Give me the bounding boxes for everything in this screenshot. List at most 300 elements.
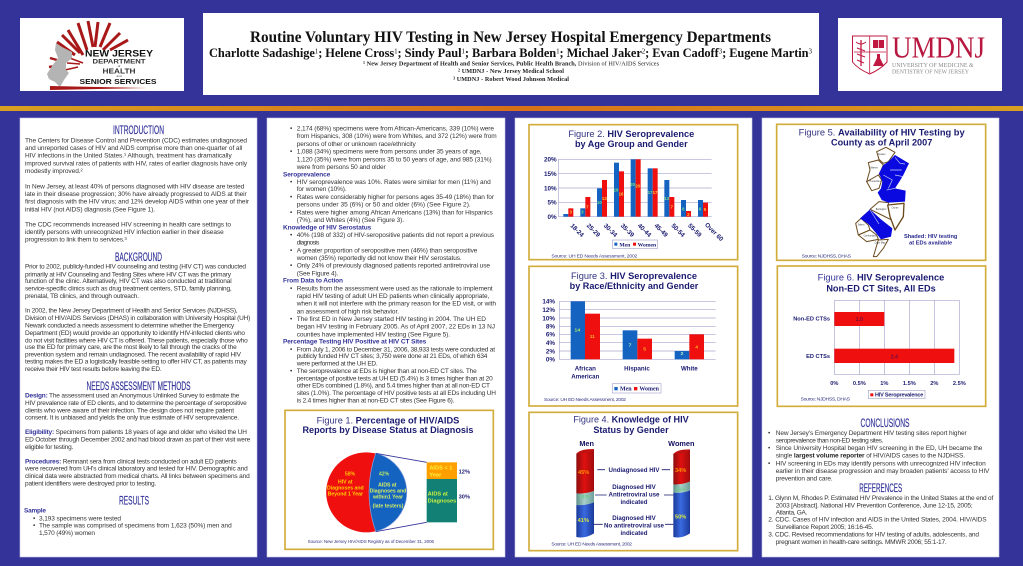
text block: conclusions: single largest volume reporter of HIV/AIDS cases to the NJDHSS. <box>776 453 965 460</box>
text block: seroprevalence: Seroprevalence <box>283 171 331 178</box>
text block: needs assessment methods: clinical data were abstracted from medical charts. All links between specimens and <box>25 473 250 480</box>
figure 3 bar values: 11 <box>590 334 595 340</box>
text block: from data to action: From Data to Action <box>283 278 343 285</box>
logo: UMDNJ: DENTISTRY OF NEW JERSEY <box>892 70 970 76</box>
text block: seroprevalence: Rates were considerably higher for persons ages 35-49 (18%) than for <box>297 194 495 201</box>
figure 2 y-axis labels: 5% <box>548 200 557 207</box>
figure 6 category labels <box>793 317 830 360</box>
affiliations: New Jersey Department of Health and Senior Services, Public Health Branch, <box>365 60 578 68</box>
figure 2 bar values: 10 <box>597 200 602 205</box>
figure 3 y-axis labels: 14% <box>542 299 555 306</box>
text block: sample continued <box>290 125 497 171</box>
text block: results sample: The sample was comprised of specimens from 1,623 (50%) men and <box>39 523 232 530</box>
map annotation: Shaded: HIV testing <box>904 234 958 240</box>
authors: ; Barbara Bolden <box>465 46 556 60</box>
figure 6 source: Source: NJDHSS, DHAS <box>801 397 851 403</box>
figure 2 y-axis labels: 10% <box>544 185 557 192</box>
text block: from data to action: rapid HIV testing of adult UH ED patients when clinically appropriate, <box>297 293 490 300</box>
text block: conclusions <box>768 430 990 483</box>
authors: 1 <box>315 48 319 56</box>
figure 2 bar values: 6 <box>682 206 685 211</box>
title panel: UMDNJ - Robert Wood Johnson Medical <box>455 76 569 83</box>
authors: 3 <box>719 48 723 56</box>
text block: percentage testing HIV positive: sites (1.0%). The percentage of HIV positive tests at all EDs including UH <box>297 390 496 397</box>
text block: references: Atlanta, GA. <box>776 510 808 517</box>
New Jersey county map: Hunterdon <box>870 180 881 183</box>
figure 5 title: Figure 5. Availability of HIV Testing by <box>799 127 966 137</box>
figure 2 legend: Men <box>619 242 631 248</box>
figure 3 y-axis labels: 6% <box>546 332 555 339</box>
text block: from data to action: • <box>290 285 293 292</box>
text block: introduction: first diagnosis with the HIV virus; and 12% develop AIDS within one year of their <box>25 199 250 206</box>
text block: sample continued: 1,120 (35%) were from persons 35 to 50 years of age, and 985 (31%) <box>297 156 492 163</box>
text block: introduction: and unreported cases of HIV and AIDS comprise more than one-quarter of all <box>25 145 243 152</box>
text block: introduction: In New Jersey, at least 40% of persons diagnosed with HIV disease are tested <box>25 183 245 190</box>
text block: seroprevalence <box>283 171 495 224</box>
figure 3 title: Figure 3. HIV Seroprevalence <box>571 271 697 281</box>
figure 3 bar values: 14 <box>575 328 580 334</box>
text block: background: Prior to 2002, publicly-funded HIV counseling and testing (HIV CT) was conducted <box>25 264 246 271</box>
title panel: 3 <box>453 76 455 80</box>
text block: sample continued: • <box>290 149 293 156</box>
figure 3 y-axis labels: 8% <box>546 324 555 331</box>
figure 3 source: Source: UH ED Needs Assessment, 2002 <box>544 397 626 403</box>
figure 3 bar values: 7 <box>629 342 632 348</box>
authors: 3 <box>808 48 812 56</box>
New Jersey county map: Cape May <box>875 242 886 244</box>
figure 3 legend: Women <box>639 387 660 393</box>
figure 2 bar values: 20 <box>635 183 641 188</box>
pie labels: 58% <box>345 471 356 477</box>
text block: from data to action: when it will not interfere with the primary reason for the ED visit, or with <box>296 301 496 308</box>
bar labels <box>428 466 470 504</box>
affiliations: Division of HIV/AIDS Services <box>578 60 660 68</box>
text block: background: receive their HIV test results before leaving the ED. <box>25 366 162 373</box>
text block: background: use the ED for primary care, are the most likely to fall through the cracks of the <box>25 344 237 351</box>
bar labels: Year <box>429 473 442 479</box>
text block: seroprevalence: • <box>290 179 293 186</box>
breakdown stacked bar <box>427 462 457 522</box>
heading: results: RESULTS <box>119 496 149 508</box>
figure 2 y-axis labels: 0% <box>548 214 557 221</box>
text block: conclusions: seroprevalence than non-ED testing sites. <box>776 437 884 444</box>
panel: column 4 <box>762 118 999 557</box>
category labels: No antiretroviral use <box>604 522 665 529</box>
men and women column headers: Men <box>579 439 595 448</box>
figure 2 x-axis labels: 45-49 <box>653 222 669 239</box>
figure 2 bar values: 7 <box>670 204 673 209</box>
cylinder percentages: 50% <box>675 515 686 521</box>
authors: 1 <box>461 48 465 56</box>
text block: results sample: Sample <box>24 507 46 514</box>
authors: ; Michael Jaker <box>559 46 642 60</box>
figure 3 bar values: 2 <box>681 351 684 357</box>
text block: conclusions: Since University Hospital began HIV screening in the ED, UH became the <box>776 445 983 452</box>
text block: conclusions: • <box>768 460 771 467</box>
text block: references: 1. Glynn M, Rhodes P. Estimated HIV Prevalence in the United States at the end of <box>768 495 993 502</box>
figure 4: knowledge of HIV status by gender: Status by Gender <box>593 425 669 435</box>
text block: from data to action <box>283 278 496 338</box>
text block: needs assessment methods: were recovered from UH's clinical laboratory and tested for HIV. Demographic and <box>24 466 248 473</box>
figure 6 bar values: 1.0 <box>856 317 863 323</box>
figure 6 legend: HIV Seroprevalence <box>875 392 923 398</box>
figure 2 bar values: 5 <box>704 207 707 212</box>
text block: percentage testing HIV positive: • <box>290 346 293 353</box>
authors: 1 <box>556 48 560 56</box>
figure 2 bar values: 17 <box>653 190 658 195</box>
figure 1: pie chart of disease status at diagnosis: Reports by Disease Status at Diagnosis <box>302 425 473 435</box>
New Jersey county map: Cumberland <box>864 235 877 238</box>
affiliations: 1 <box>363 60 365 65</box>
text block: introduction <box>25 137 250 244</box>
figure 3 category labels <box>571 365 698 380</box>
category labels: indicated <box>620 499 648 506</box>
New Jersey county map: Salem <box>858 225 864 227</box>
figure 6 x-axis labels: 1% <box>880 381 888 387</box>
figure 1 title: Figure 1. Percentage of HIV/AIDS <box>317 415 459 425</box>
text block: needs assessment methods: ED October through December 2002 and had blood drawn as part of their visit were <box>25 437 251 444</box>
figure 6 title: Figure 6. HIV Seroprevalence <box>818 272 944 282</box>
figure 6: seroprevalence non-ED CT sites vs all EDs: Non-ED CT Sites, All EDs <box>826 283 936 293</box>
text block: percentage testing HIV positive: were performed at the UH ED. <box>296 361 378 368</box>
logo: New Jersey Department of Health and Senior Services: SENIOR SERVICES <box>80 77 157 86</box>
figure 2 y-axis labels: 15% <box>544 171 557 178</box>
figure 5: availability of HIV testing by county <box>777 124 986 260</box>
text block: percentage testing HIV positive <box>283 339 496 404</box>
text block: needs assessment methods: consent. It is unbiased and yields the only true estimate of HIV seroprevalence. <box>25 415 239 422</box>
heading: introduction: INTRODUCTION <box>113 125 164 137</box>
text block: needs assessment methods: patient identifiers were destroyed prior to testing. <box>25 481 156 488</box>
cylinder percentages: 34% <box>675 468 686 474</box>
text block: needs assessment methods: clients who were aware of their infection. The design does not require patient <box>25 407 234 414</box>
text block: percentage testing HIV positive: Percentage Testing HIV Positive at HIV CT Sites <box>283 339 427 346</box>
logo: New Jersey Department of Health and Senior Services: of <box>118 64 120 68</box>
figure 4 source: Source: UH ED Needs Assessment, 2002 <box>551 541 632 547</box>
text block: results sample: 1,570 (49%) women <box>39 530 95 537</box>
logo: New Jersey Department of Health and Senior Services: HEALTH <box>102 68 136 76</box>
text block: from data to action: began HIV testing in February 2005. As of April 2007, 22 EDs in 13 NJ <box>297 324 495 331</box>
title: Routine Voluntary HIV Testing in New Jersey Hospital Emergency Departments <box>250 29 771 46</box>
figure 2 bar values: 2 <box>687 212 690 217</box>
gold divider band <box>0 106 1023 111</box>
text block: references: 2003 [Abstract]. National HIV Prevention Conference, June 12-15, 2005; <box>776 502 973 509</box>
figure 5 source: Source: NJDHSS, DHAS <box>802 253 852 259</box>
figure 6 gridlines <box>834 300 959 375</box>
text block: knowledge of HIV serostatus: • <box>290 247 293 254</box>
text block: references: 2. CDC. Cases of HIV infection and AIDS in the United States, 2004. HIV/AIDS <box>768 517 987 524</box>
heading: references: REFERENCES <box>859 483 902 495</box>
text block: background: In 2002, the New Jersey Department of Health and Senior Services (NJDHSS), <box>25 307 238 314</box>
figure 6 category labels: Non-ED CTSs <box>793 317 830 323</box>
figure 1 source: Source: New Jersey HIV/AIDS Registry as of December 31, 2006 <box>308 539 434 544</box>
figure 2 bars <box>563 159 708 217</box>
conclusions and references <box>768 418 993 546</box>
text block: needs assessment methods: eligible for testing. <box>25 444 73 451</box>
text block: needs assessment methods: Eligibility: Specimens from patients 18 years of age and older who visited the UH <box>25 429 247 436</box>
pie labels: Diagnoses and <box>327 486 364 492</box>
pie labels: 42% <box>379 471 390 477</box>
bar labels: AIDS at <box>428 492 448 498</box>
text block: results sample: • <box>33 515 36 522</box>
figure 3 category labels: African <box>575 365 596 372</box>
cylinder percentages: 45% <box>578 470 589 476</box>
map annotation <box>904 234 958 247</box>
text block: knowledge of HIV serostatus: 40% (198 of 332) of HIV-seropositive patients did not report a previous <box>297 232 495 239</box>
text block: sample continued: from Hispanics, 308 (10%) were from Whites, and 372 (12%) were from <box>297 133 497 140</box>
figure 6 x-axis labels: 2.5% <box>953 381 966 387</box>
text block: introduction: improved survival rates of patients with HIV, rates of earlier diagnosis have only <box>25 160 248 167</box>
figure 3 y-axis labels: 2% <box>546 348 555 355</box>
men and women column headers: Women <box>668 439 695 448</box>
figure 5: availability of HIV testing by county: County as of April 2007 <box>831 137 932 147</box>
figure 4 title: Figure 4. Knowledge of HIV <box>573 415 690 425</box>
figure 3: seroprevalence by race/ethnicity and gender: by Race/Ethnicity and Gender <box>570 281 699 291</box>
text block: background: Department (ED) would provide an opportunity to identify HIV-infected clients who <box>25 330 245 337</box>
figure 6 bars <box>834 312 954 363</box>
text block: background: prenatal, TB clinics, and through outreach. <box>25 293 139 300</box>
figure 3 bar values <box>575 328 698 357</box>
figure 2 bar values: 16 <box>619 192 624 197</box>
figure 3 bars <box>571 301 704 359</box>
authors: ; Evan Cadoff <box>645 46 720 60</box>
category labels <box>604 467 665 537</box>
text block: sample continued: 1,088 (34%) specimens were from persons under 35 years of age, <box>297 149 482 156</box>
text block: sample continued: • <box>290 125 293 132</box>
text block: results sample: • <box>33 523 36 530</box>
text block: knowledge of HIV serostatus <box>283 224 495 277</box>
figure 2 title: Figure 2. HIV Seroprevalence <box>568 129 694 139</box>
pie labels: Diagnoses and <box>370 489 406 495</box>
pie labels <box>327 471 406 509</box>
authors: ; Eugene Martin <box>722 46 809 60</box>
figure 2 x-axis labels: 30-34 <box>602 222 619 239</box>
figure 3 category labels: American <box>571 373 600 380</box>
figure 1: pie chart of disease status at diagnosis <box>285 410 493 549</box>
figure 3 gridlines <box>559 301 716 359</box>
text block: seroprevalence: • <box>290 194 293 201</box>
logo: New Jersey Department of Health and Senior Services: and <box>116 74 122 78</box>
figure 3: seroprevalence by race/ethnicity and gender <box>529 266 738 406</box>
pie labels: HIV at <box>338 480 353 486</box>
authors: 1 <box>394 48 398 56</box>
text block: seroprevalence: HIV seroprevalence was 10%. Rates were similar for men (11%) and <box>297 179 491 186</box>
text block: percentage testing HIV positive: The seroprevalence at EDs is higher than at non-ED CT sites. The <box>297 368 477 375</box>
figure 2 bar values: 17 <box>648 190 653 195</box>
text block: percentage testing HIV positive: publicly funded HIV CT sites; 3,750 were done at 21 EDs, of which 634 <box>297 353 488 360</box>
figure 6 x-axis labels: 0% <box>830 381 838 387</box>
text block: background: Newark conducted a needs assessment to determine whether the Emergency <box>25 322 235 329</box>
title panel: UMDNJ - New Jersey Medical School <box>460 68 564 75</box>
text block: knowledge of HIV serostatus: Knowledge of HIV Serostatus <box>283 224 372 231</box>
figure 2 x-axis labels: 55-59 <box>686 222 703 239</box>
category labels: Undiagnosed HIV <box>609 467 660 474</box>
text block: introduction: HIV infections in the United States.¹ Although, treatment has dramatically <box>25 153 232 160</box>
figure 6 bar values: 2.4 <box>891 354 898 360</box>
text block: conclusions: prevention and care. <box>776 476 833 483</box>
logo: UMDNJ: UMDNJ <box>892 30 985 64</box>
text block: from data to action: an assessment of high risk behavior. <box>297 308 399 315</box>
text block: seroprevalence: Rates were higher among African Americans (13%) than for Hispanics <box>297 209 493 216</box>
text block: needs assessment methods: Procedures: Remnant sera from clinical tests conducted on adult ED patients <box>25 458 237 465</box>
text block: knowledge of HIV serostatus: diagnosis <box>297 240 320 247</box>
text block: seroprevalence: (7%), and Whites (4%) (See Figure 3). <box>297 217 404 224</box>
text block: background: do not visit facilities where HIV CT is offered. These patients, especially those who <box>25 337 248 344</box>
figure 2 bar values: 3 <box>581 209 584 214</box>
figure 4: knowledge of HIV status by gender <box>529 412 738 551</box>
figure 2 x-axis labels: 40-44 <box>636 222 653 239</box>
text block: sample continued: were from persons 50 and older <box>296 164 387 171</box>
figure 2 bar values: 3 <box>569 209 572 214</box>
text block: seroprevalence: persons under 35 (6%) or 50 and older (6%) (See Figure 2). <box>297 202 471 209</box>
figure 2 bar values: 6 <box>699 206 702 211</box>
figure 2 source: Source: UH ED Needs Assessment, 2002 <box>551 253 638 259</box>
bar labels: Diagnoses <box>428 498 456 504</box>
text block: needs assessment methods: Design: The assessment used an Anonymous Unlinked Survey to estimate the <box>25 393 240 400</box>
category labels: Diagnosed HIV <box>612 484 657 491</box>
text block: introduction: The Centers for Disease Control and Prevention (CDC) estimates undiagnosed <box>25 137 247 144</box>
text block: references: pregnant women in health-care settings. MMWR 2006; 55:1-17. <box>776 539 947 546</box>
text block: percentage testing HIV positive: is 2.4 times higher than at non-ED CT sites (See Figure 6). <box>297 397 455 404</box>
text block: background: Division of HIV/AIDS Services (DHAS) in collaboration with University Hospital (UH) <box>25 315 250 322</box>
text block: references: 3. CDC. Revised recommendations for HIV testing of adults, adolescents, and <box>768 532 979 539</box>
figure 2 x-axis labels: 18-24 <box>569 222 585 239</box>
text block: percentage testing HIV positive: From July 1, 2006 to December 31, 2006, 38,933 tests were conducted at <box>297 346 495 353</box>
text block: knowledge of HIV serostatus: • <box>290 232 293 239</box>
text block: background: service-specific clinics such as drug treatment centers, STD, family planning, <box>25 286 232 293</box>
text block: background: testing makes the ED a logistically feasible setting to offer HIV CT, as patients may <box>25 359 247 366</box>
figure 3 y-axis labels: 12% <box>542 307 555 314</box>
logo: New Jersey Department of Health and Senior Services <box>20 18 184 91</box>
figure 3 category labels: White <box>681 365 698 372</box>
figure 2 axes and gridlines <box>558 159 712 217</box>
figure 6 category labels: ED CTSs <box>806 354 830 360</box>
New Jersey county map <box>856 147 909 257</box>
text block: conclusions: • <box>768 445 771 452</box>
map annotation: at EDs available <box>909 241 952 247</box>
text block: background: primarily at HIV Counseling and Testing Sites where HIV CT was the primary <box>25 271 232 278</box>
title panel: 2 <box>458 68 460 72</box>
bar labels: AIDS < 1 <box>429 466 452 472</box>
figure 2 x-axis labels: 35-39 <box>619 222 636 239</box>
text block: introduction: initial HIV (not AIDS) diagnosis (See Figure 1). <box>25 206 155 213</box>
text block: percentage testing HIV positive: other EDs combined (1.8%), and 5.4 times higher than at all non-ED CT <box>297 383 490 390</box>
text block: introduction: late in their disease progression; 30% have already progressed to AIDS at their <box>25 191 248 198</box>
heading: conclusions: CONCLUSIONS <box>860 418 910 430</box>
figure 6 legend <box>868 390 925 399</box>
logo: New Jersey Department of Health and Senior Services: NEW JERSEY <box>85 48 153 58</box>
text block: introduction: progression to link them to services.³ <box>25 237 128 244</box>
figure 2: seroprevalence by age group and gender <box>529 125 738 260</box>
figure 3 y-axis labels: 10% <box>542 315 555 322</box>
text block: from data to action: counties have implemented HIV testing (See Figure 5). <box>297 331 450 338</box>
text block: conclusions: New Jersey's Emergency Department HIV testing sites report higher <box>776 430 968 437</box>
figure 2 x-axis labels: 50-54 <box>670 222 686 239</box>
New Jersey county map: Burlington <box>876 208 887 211</box>
heading: background: BACKGROUND <box>115 252 162 264</box>
pie labels: Beyond 1 Year <box>328 492 363 498</box>
logo: UMDNJ <box>838 18 1002 91</box>
bar labels: 12% <box>459 470 470 476</box>
figure 2 bar values <box>569 182 707 217</box>
cylinder percentages: 14% <box>578 495 590 501</box>
heading: needs assessment methods: NEEDS ASSESSMENT METHODS <box>86 381 191 393</box>
figure 3 y-axis labels <box>542 299 555 364</box>
text block: background <box>25 264 250 373</box>
figure 2 bar values: 20 <box>630 182 636 187</box>
figure 3 legend <box>612 384 661 393</box>
cylinder percentages: 16% <box>675 487 686 493</box>
authors: ; Sindy Paul <box>398 46 462 60</box>
panel: column 3 <box>515 118 752 557</box>
figure 3 legend: Men <box>620 387 632 393</box>
text block: knowledge of HIV serostatus: Only 24% of previously diagnosed patients reported antiretroviral use <box>297 263 490 270</box>
text block: from data to action: Results from the assessment were used as the rationale to implement <box>297 285 493 292</box>
text block: seroprevalence: • <box>290 209 293 216</box>
text block: percentage testing HIV positive: • <box>290 368 293 375</box>
panel: column 2 - results continued and figure 1 <box>267 118 505 557</box>
figure 6 x-axis labels: 1.5% <box>903 381 916 387</box>
text block: needs assessment methods <box>24 393 251 488</box>
text block: introduction: modestly improved.² <box>25 168 84 175</box>
men cylinder <box>576 449 594 538</box>
figure 6: seroprevalence non-ED CT sites vs all EDs <box>777 266 986 406</box>
figure 6 x-axis labels: 0.5% <box>853 381 866 387</box>
New Jersey county map: Ocean <box>892 207 899 209</box>
figure 2 legend <box>612 240 658 248</box>
text block: knowledge of HIV serostatus: women (35%) reportedly did not know their HIV serostatus. <box>296 255 462 262</box>
authors: ; Helene Cross <box>318 46 394 60</box>
figure 6 x-axis labels <box>830 381 966 387</box>
figure 2 legend: Women <box>638 242 657 248</box>
bar labels: 30% <box>459 495 470 501</box>
figure 2 y-axis labels <box>544 157 557 221</box>
figure 6 bar values <box>856 317 898 360</box>
text block: conclusions: HIV screening in EDs may identify persons with unrecognized HIV infection <box>776 460 986 467</box>
category labels: indicated <box>620 530 648 537</box>
text block: knowledge of HIV serostatus: A greater proportion of seropositive men (46%) than seropositive <box>297 247 478 254</box>
figure 2: seroprevalence by age group and gender: by Age Group and Gender <box>575 139 688 149</box>
women cylinder <box>673 449 690 538</box>
authors: Charlotte Sadashige <box>209 46 315 60</box>
text block: background: prevention system and remain undiagnosed. The recent availability of rapid HIV <box>25 351 242 358</box>
text block: references <box>768 495 993 546</box>
figure 6 x-axis labels: 2% <box>930 381 938 387</box>
figure 2 x-axis labels: Over 60 <box>703 222 725 243</box>
text block: sample continued: 2,174 (68%) specimens were from African-Americans, 339 (10%) were <box>297 125 494 132</box>
text block: results sample: 3,193 specimens were tested <box>39 515 121 522</box>
cylinder percentages <box>578 468 686 524</box>
category labels: Antiretroviral use <box>609 492 660 499</box>
title panel <box>203 13 819 95</box>
figure 2 x-axis labels: 25-29 <box>585 222 602 239</box>
text block: conclusions: earlier in their disease progression and may broaden patients' access to HIV <box>776 468 990 475</box>
figure 2 bar values: 13 <box>664 196 670 201</box>
New Jersey county map: Warren <box>870 166 878 169</box>
text block: seroprevalence: for women (10%). <box>297 186 347 193</box>
logo: New Jersey Department of Health and Senior Services: DEPARTMENT <box>92 58 146 65</box>
text block: introduction: The CDC recommends increased HIV screening in health care settings to <box>25 221 231 228</box>
text block: results sample <box>24 507 232 537</box>
figure 3 bar values: 4 <box>695 344 698 350</box>
figure 3 bar values: 5 <box>643 346 646 352</box>
text block: needs assessment methods: HIV prevalence rate of ED clients, and to determine the percentage of seropositive <box>25 400 247 407</box>
text block: conclusions: • <box>768 430 771 437</box>
pie slices <box>326 452 427 532</box>
text block: knowledge of HIV serostatus: • <box>290 263 293 270</box>
New Jersey county map: Sussex <box>878 154 886 156</box>
pie labels: (late testers) <box>373 503 404 509</box>
connector lines <box>593 470 673 524</box>
